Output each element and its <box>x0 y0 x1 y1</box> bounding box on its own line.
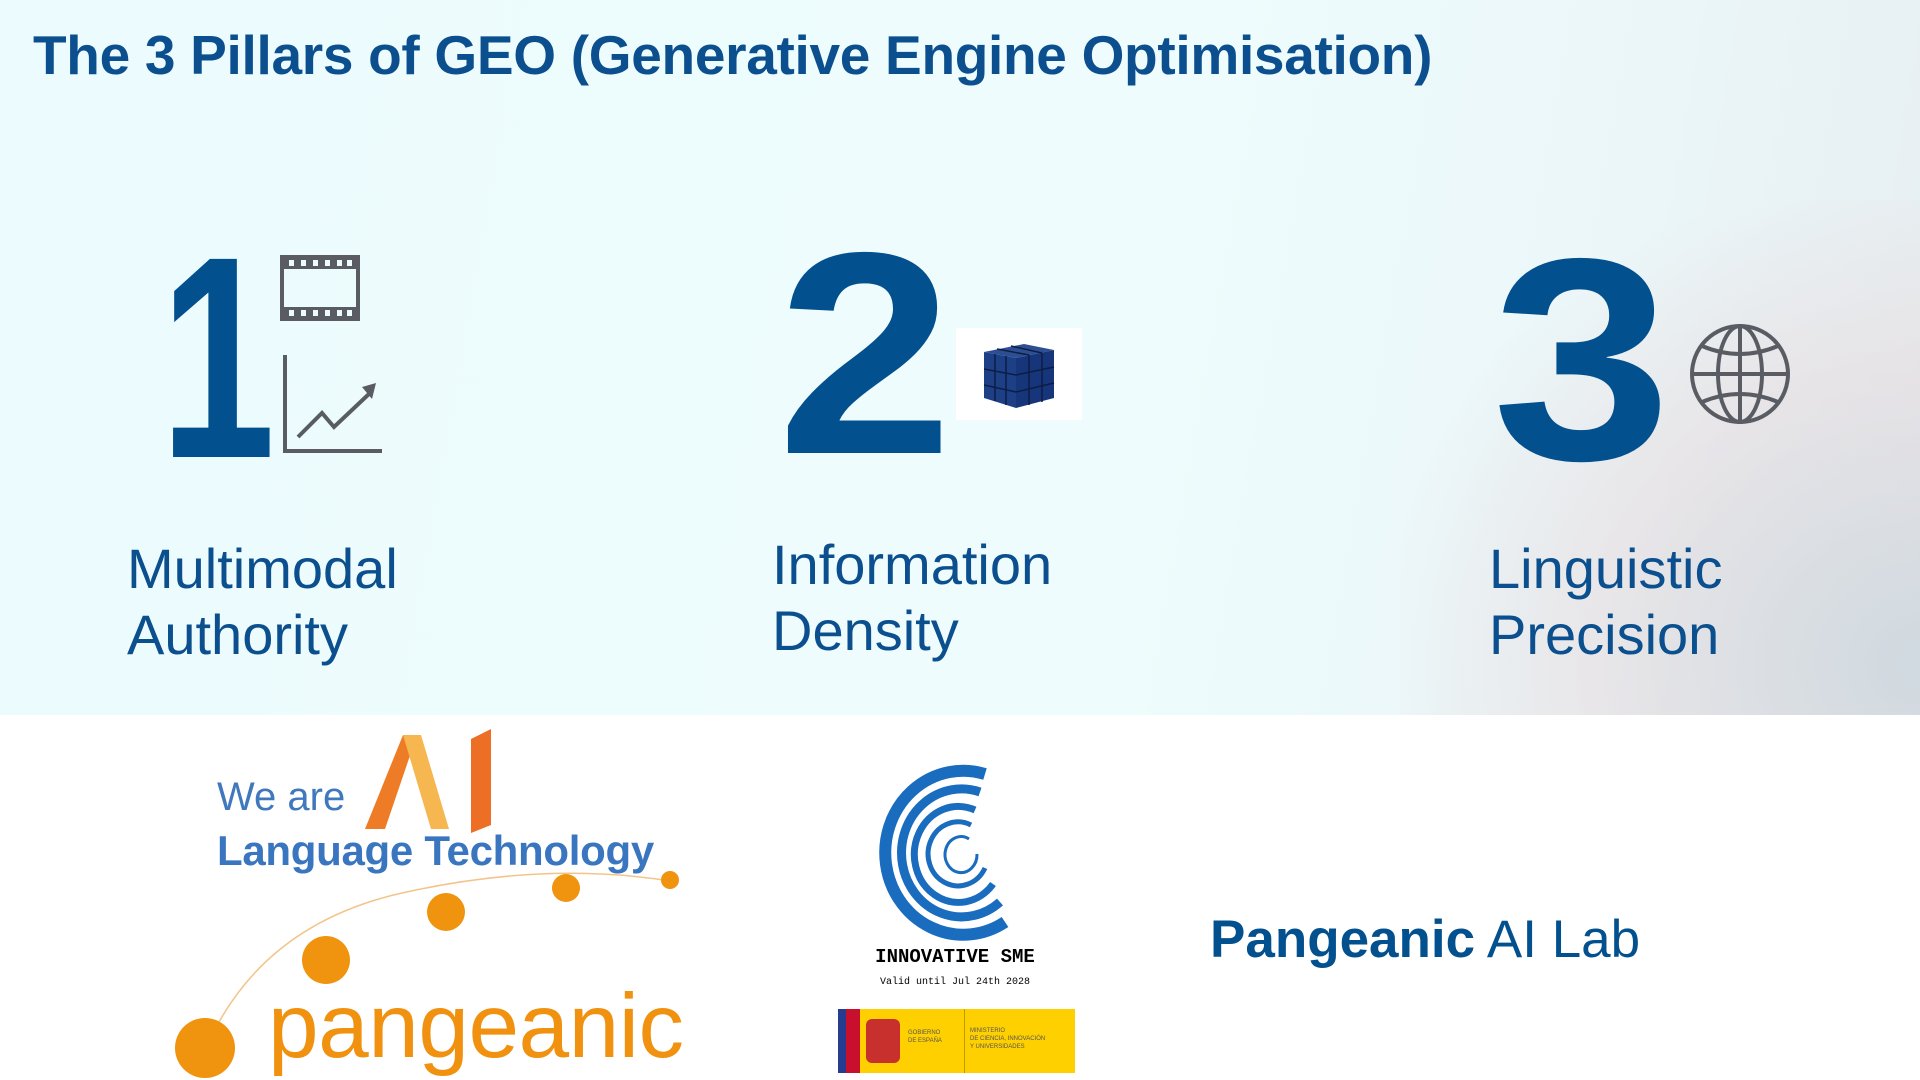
icon: film strip <box>280 255 360 321</box>
spanish government bar <box>838 1009 1075 1073</box>
number 3: 3 <box>1492 199 1671 521</box>
we are text: We are <box>217 775 345 819</box>
icon: globe <box>1690 324 1790 424</box>
spanish government bar: MINISTERIO <box>970 1028 1005 1034</box>
language technology: Language Technology <box>217 827 654 874</box>
label: Precision <box>1489 603 1719 666</box>
pillar 1 <box>127 197 398 666</box>
logo: pangeanic We are AI <box>175 729 684 1078</box>
AI mark <box>365 729 491 833</box>
badge: innovative SME <box>835 762 1075 1080</box>
icon: growth chart <box>283 355 382 453</box>
spanish government bar: Y UNIVERSIDADES <box>970 1044 1025 1050</box>
spiral logo <box>879 764 1008 941</box>
badge text: INNOVATIVE SME <box>875 946 1035 968</box>
pillar 3 <box>1489 199 1790 666</box>
badge: innovative SME: Valid until Jul 24th 2028 <box>880 977 1030 988</box>
pillar 2 <box>772 193 1082 662</box>
label <box>772 533 1052 662</box>
number 1: 1 <box>160 197 275 519</box>
label: Multimodal <box>127 537 398 600</box>
number 2: 2 <box>777 193 953 515</box>
spanish government bar: DE ESPAÑA <box>908 1038 942 1044</box>
label <box>1489 537 1722 666</box>
spanish government bar: DE CIENCIA, INNOVACIÓN <box>970 1036 1045 1042</box>
orange dots arc <box>175 871 679 1078</box>
title: The 3 Pillars of GEO (Generative Engine Optimisation) <box>33 24 1432 86</box>
label: Density <box>772 599 959 662</box>
label: Authority <box>127 603 348 666</box>
pangeanic AI lab wordmark: Pangeanic AI Lab <box>1210 910 1640 969</box>
icon: cube <box>956 328 1082 420</box>
label: Information <box>772 533 1052 596</box>
label <box>127 537 398 666</box>
pangeanic word: pangeanic <box>268 976 684 1077</box>
spanish government bar: GOBIERNO <box>908 1030 940 1036</box>
label: Linguistic <box>1489 537 1722 600</box>
